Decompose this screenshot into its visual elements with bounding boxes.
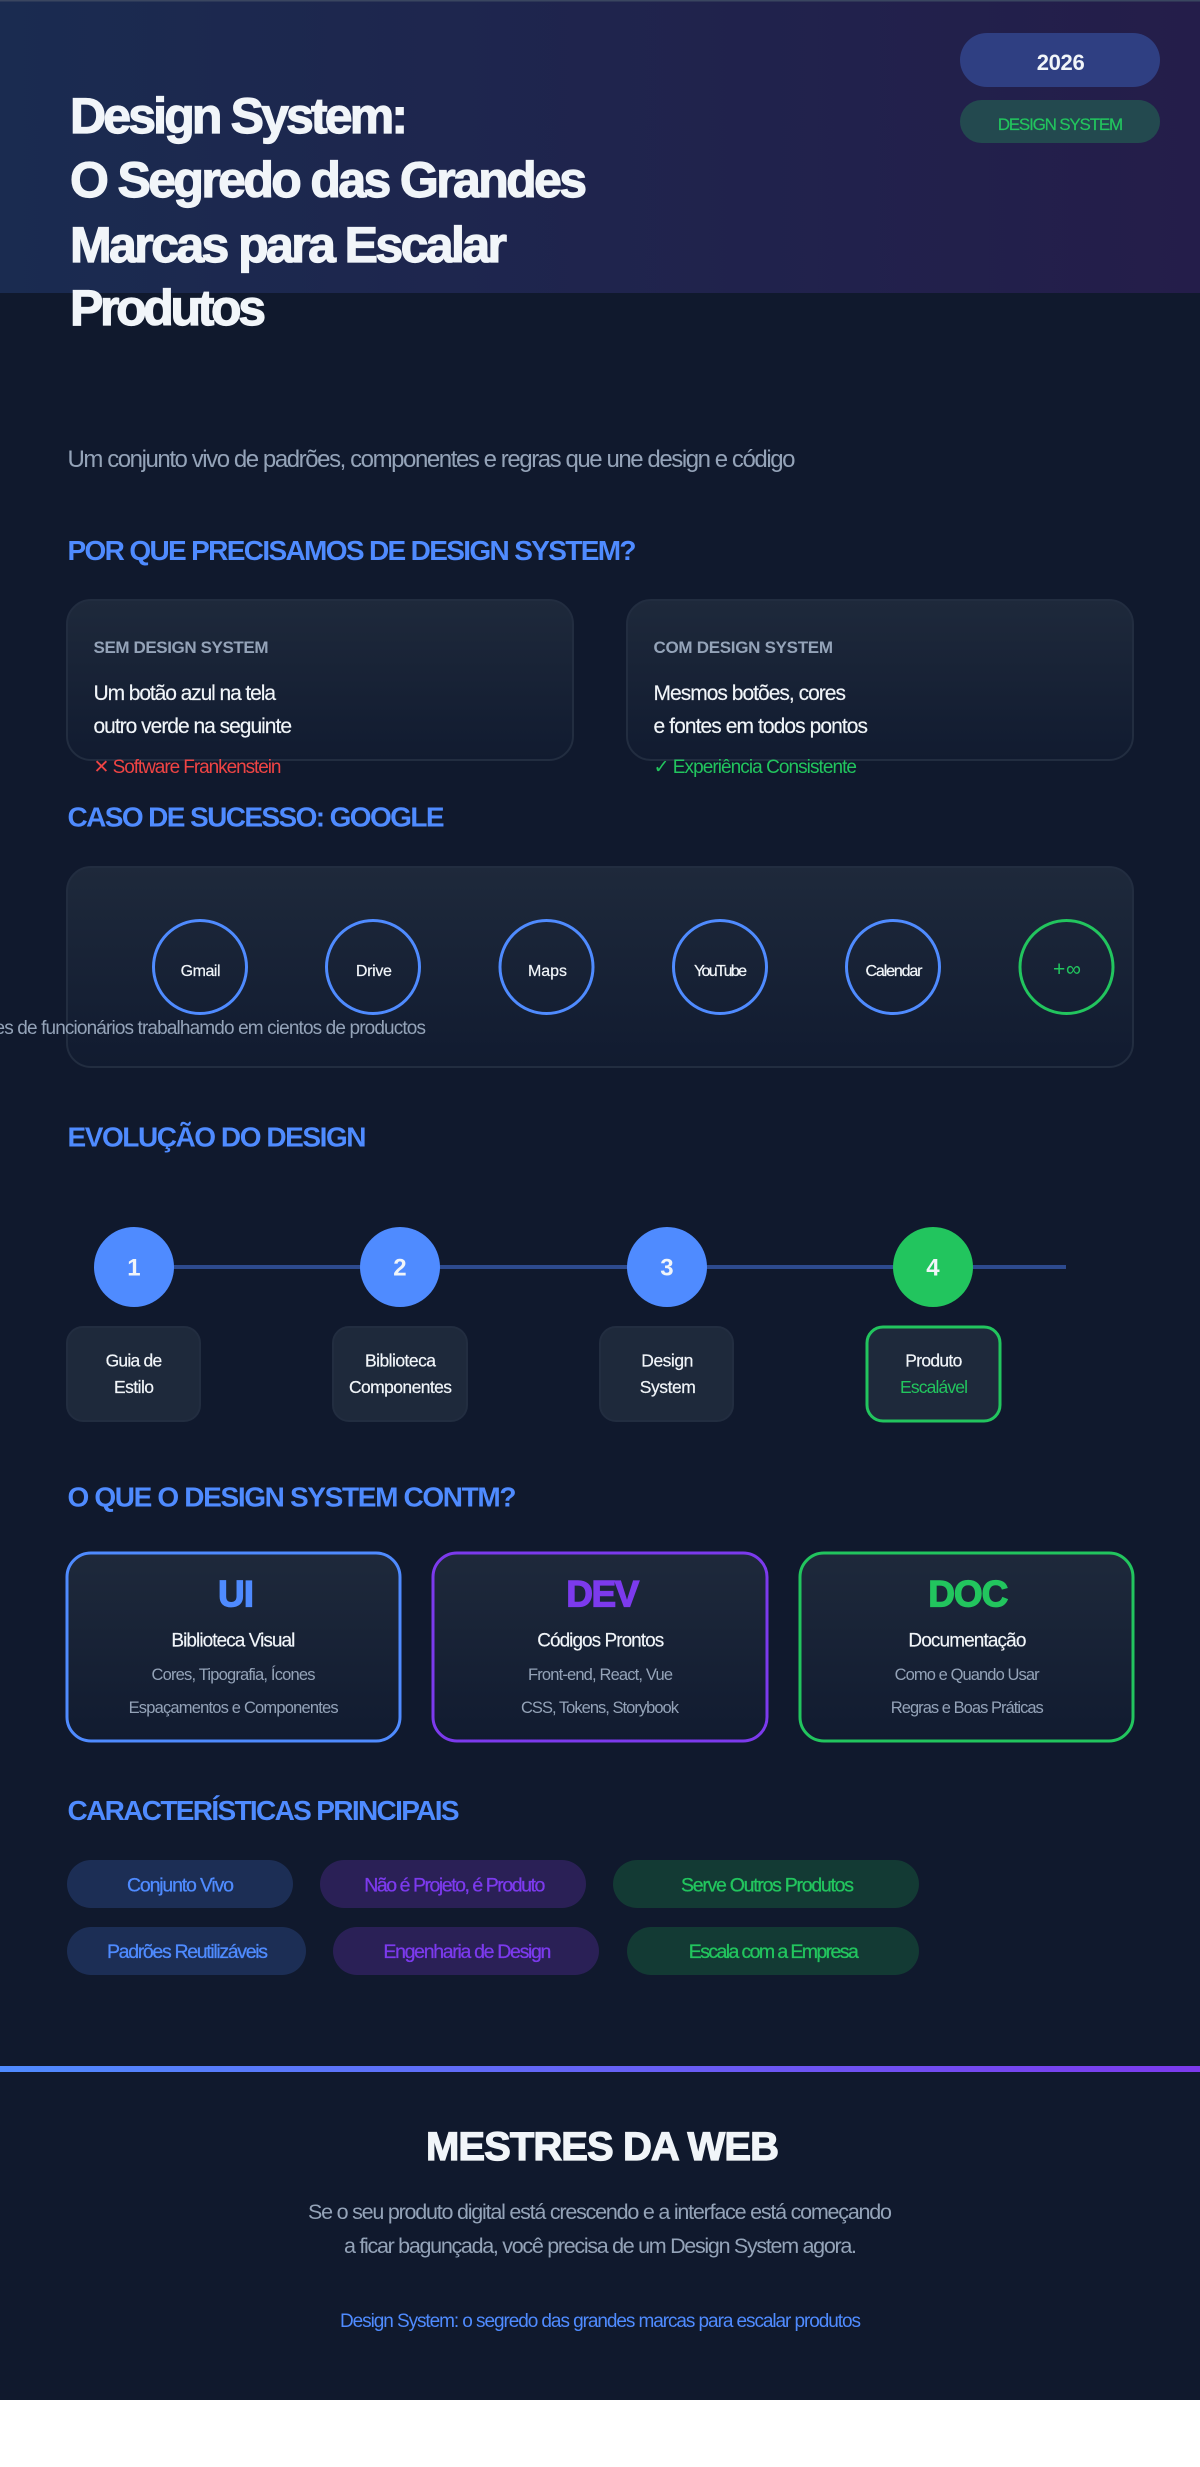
header band [0,0,1200,293]
label: sem design system: SEM DESIGN SYSTEM [94,638,268,657]
tag: escala com a empresa [627,1927,919,1975]
step box: design system [600,1327,733,1421]
step 1: 1 [127,1254,141,1282]
panel: UI: UI [218,1574,254,1614]
step 3: 3 [660,1254,674,1282]
title: Design System: [70,88,408,144]
panel: DOC: DOC [928,1574,1008,1614]
text: problema: Um botão azul na tela [94,682,276,705]
product: calendar [846,920,940,1014]
timeline: evolução do design [94,1227,1066,1307]
step 3 [627,1227,707,1307]
title: Produtos [70,280,266,336]
footer [0,2066,1200,2332]
product: mais infinito [1020,920,1113,1014]
badge: year 2026 [960,33,1160,87]
step 1 [94,1227,174,1307]
product: gmail: Gmail [181,963,221,980]
step 2 [360,1227,440,1307]
step box: biblioteca componentes: Componentes [349,1377,452,1397]
product: youtube: YouTube [694,963,747,980]
panel: DOC: Como e Quando Usar [895,1666,1040,1684]
label: com design system: COM DESIGN SYSTEM [654,638,833,657]
product: maps [500,920,593,1014]
step box: guia de estilo [67,1327,200,1421]
result: experiência consistente: ✓ Experiência Consistente [654,757,857,778]
product: youtube [674,920,766,1014]
panel: DEV: DEV [566,1574,640,1614]
panel: DEV: Códigos Prontos [537,1630,664,1652]
step 4 [893,1227,973,1307]
tag: conjunto vivo: Conjunto Vivo [127,1874,234,1896]
panel: DEV [433,1553,767,1741]
step box: produto escalável: Produto [905,1350,962,1370]
step box: produto escalável: Escalável [900,1377,968,1397]
result: software frankenstein: ✕ Software Frankenstein [94,757,282,778]
panel: UI: Espaçamentos e Componentes [129,1699,339,1717]
heading: caso de sucesso: CASO DE SUCESSO: GOOGLE [68,802,444,832]
product: drive [326,920,420,1014]
heading: por que precisamos: POR QUE PRECISAMOS DE DESIGN SYSTEM? [68,535,636,566]
footer text: Se o seu produto digital está crescendo e a interface está começando [308,2200,892,2224]
text: problema [94,682,292,738]
footer tagline: Design System: o segredo das grandes marcas para escalar produtos [340,2311,861,2332]
heading: evolução: EVOLUÇÃO DO DESIGN [68,1122,366,1152]
tag: não é projeto: Não é Projeto, é Produto [364,1874,545,1896]
footer text [308,2200,892,2258]
footer text: a ficar bagunçada, você precisa de um Design System agora. [344,2234,857,2258]
step box: guia de estilo: Estilo [114,1377,154,1397]
heading: o que contém: O QUE O DESIGN SYSTEM CONTM? [68,1482,516,1512]
panel: sem design system [67,600,573,778]
tag: escala com a empresa: Escala com a Empresa [689,1941,859,1963]
panel: UI [67,1553,400,1741]
product: maps: Maps [528,963,567,980]
tag: engenharia de design: Engenharia de Design [383,1941,551,1963]
product: drive: Drive [356,963,392,980]
text: solução: Mesmos botões, cores [654,682,846,705]
badge: design system: DESIGN SYSTEM [998,115,1123,134]
footer title: MESTRES DA WEB [426,2125,779,2169]
text: problema: outro verde na seguinte [94,715,292,738]
step box: design system: Design [641,1350,693,1370]
step box: design system: System [640,1377,696,1397]
badge: year 2026: 2026 [1037,50,1085,75]
tag: padrões reutilizáveis: Padrões Reutilizáveis [107,1941,268,1963]
tag: não é projeto [320,1860,586,1908]
title: Marcas para Escalar [70,217,507,273]
tag: engenharia de design [333,1927,599,1975]
step box: biblioteca componentes [333,1327,467,1421]
panel: DOC [800,1553,1133,1741]
panel: google [67,867,1133,1067]
title: O Segredo das Grandes [70,152,587,208]
panel: DOC: Documentação [908,1630,1026,1652]
badge: design system [960,100,1160,143]
step 4: 4 [926,1254,940,1282]
panel: com design system [627,600,1133,778]
step 2: 2 [393,1254,407,1282]
text: solução [654,682,868,738]
step box: produto escalável [867,1327,1000,1421]
tag: conjunto vivo [67,1860,293,1908]
product: mais infinito: +∞ [1053,958,1081,981]
product: calendar: Calendar [866,963,923,980]
panel: UI: Cores, Tipografia, Ícones [152,1665,316,1684]
tag: padrões reutilizáveis [67,1927,306,1975]
panel: DEV: CSS, Tokens, Storybook [521,1699,680,1717]
tag: serve outros produtos [613,1860,919,1908]
panel: DEV: Front-end, React, Vue [528,1666,673,1684]
step box: guia de estilo: Guia de [106,1350,162,1370]
heading: características: CARACTERÍSTICAS PRINCIPAIS [68,1795,460,1826]
text: solução: e fontes em todos pontos [654,715,868,738]
product: gmail [154,920,246,1014]
panel: UI: Biblioteca Visual [171,1630,295,1652]
title [70,88,587,336]
subtitle: Um conjunto vivo de padrões, componentes e regras que une design e código [68,446,795,473]
tag: serve outros produtos: Serve Outros Produtos [681,1874,854,1896]
panel: DOC: Regras e Boas Práticas [891,1699,1044,1717]
step box: biblioteca componentes: Biblioteca [365,1350,436,1370]
